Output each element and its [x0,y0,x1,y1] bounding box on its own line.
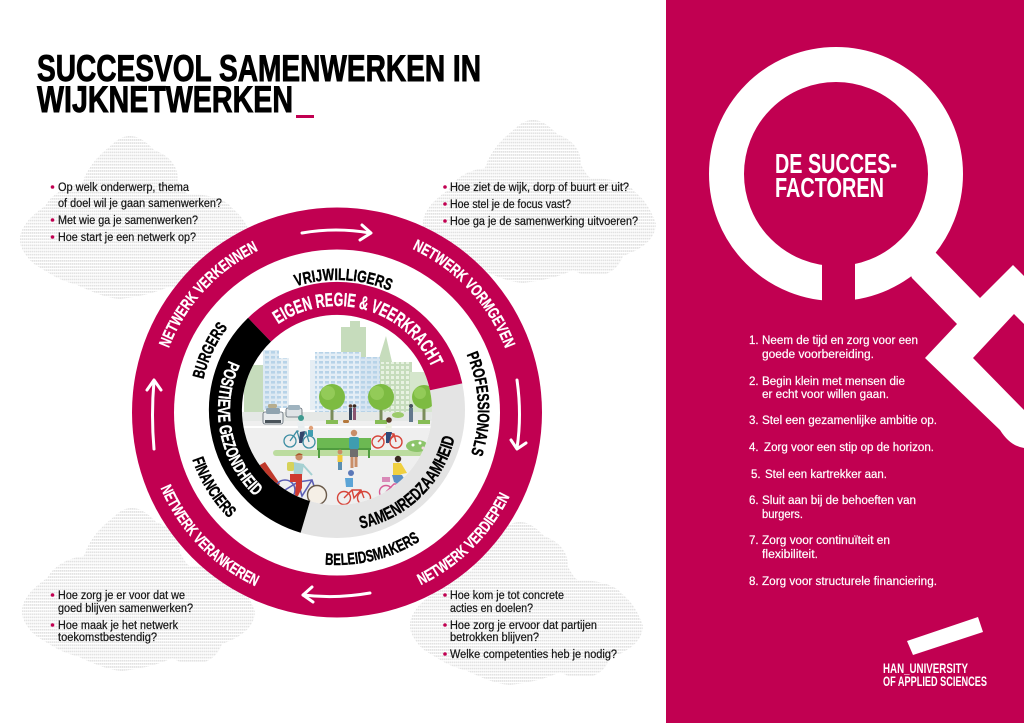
text block: network shaping questions: Hoe stel je de focus vast? [450,199,571,211]
list: success factors: Neem de tijd en zorg voor een [762,335,918,347]
inner band labels: SAMENREDZAAMHEID [359,436,454,528]
text block: network anchoring questions: Hoe zorg je er voor dat we [58,590,185,602]
centre buildings [310,352,380,412]
text block: network anchoring questions: Hoe maak je het netwerk [58,620,178,632]
cloud: bottom left [22,508,255,671]
flower bush [406,440,428,452]
text block: network exploring questions: Met wie ga je samenwerken? [58,215,198,227]
inner band labels: EIGEN REGIE & VEERKRACHT [272,292,444,366]
child cyclist [338,470,370,504]
outer ring labels: NETWERK VERANKEREN [160,484,260,586]
list: success factors: flexibiliteit. [762,549,818,561]
blue towers [263,350,289,410]
inner band labels: POSITIEVE GEZONDHEID [218,360,262,494]
stakeholder labels: FINANCIERS [192,456,236,517]
text block: network deepening questions: betrokken blijven? [450,632,539,644]
stakeholder labels: PROFESSIONALS [466,350,490,456]
title: WIJKNETWERKEN [37,79,293,120]
list: success factors: er echt voor willen gaan. [762,389,889,401]
trees [319,384,436,424]
list: success factors: 4. [749,442,759,454]
text block: network anchoring questions: goed blijven samenwerken? [58,603,193,615]
title: SUCCESVOL SAMENWERKEN IN [37,48,481,89]
text block: network exploring questions [51,182,222,244]
list: success factors [749,335,937,588]
text block: network shaping questions: Hoe ziet de wijk, dorp of buurt er uit? [450,182,629,194]
list: success factors: 6. [749,495,759,507]
panel: success factors [666,0,1024,723]
text block: network deepening questions [443,590,617,661]
list: success factors: Zorg voor een stip op de horizon. [764,442,934,454]
cloud: top left [20,136,253,299]
text block: network anchoring questions [51,590,193,644]
cloud: bottom right [410,522,643,685]
left green building [244,365,264,415]
arrow: right [511,380,526,449]
text block: network deepening questions: Hoe zorg je ervoor dat partijen [450,620,597,632]
text block: network exploring questions: Op welk onderwerp, thema [58,182,190,194]
cloud: top right [423,120,656,283]
list: success factors: Zorg voor structurele financiering. [762,576,937,588]
list: success factors: Stel een kartrekker aan. [765,469,887,481]
title [37,48,481,120]
text block: network exploring questions: Hoe start je een netwerk op? [58,232,196,244]
gray segment backing disc [209,282,465,538]
list: success factors: 5. [751,469,761,481]
outer ring labels: NETWERK VORMGEVEN [412,239,516,348]
text block: network exploring questions: of doel wil je gaan samenwerken? [58,198,222,210]
inner band: positieve gezondheid [225,330,305,517]
list: success factors: Begin klein met mensen die [762,376,905,388]
stakeholder labels: VRIJWILLIGERS [292,268,393,290]
right green towers [341,321,432,412]
list: success factors: burgers. [762,509,803,521]
circular diagram [132,208,542,618]
text block: network deepening questions: Hoe kom je tot concrete [450,590,564,602]
heading: de succesfactoren: FACTOREN [775,172,884,203]
icon: magnifier [726,64,1024,448]
text block: network anchoring questions: toekomstbestendig? [58,632,157,644]
text block: network shaping questions [443,182,638,228]
logo: HAN University of Applied Sciences [883,617,987,689]
text block: network shaping questions: Hoe ga je de samenwerking uitvoeren? [450,216,638,228]
list: success factors: 8. [749,576,759,588]
list: success factors: goede voorbereiding. [762,349,874,361]
logo: HAN University of Applied Sciences: HAN_UNIVERSITY [883,660,968,676]
girl on pink bike [380,456,407,498]
inner band: eigen regie and veerkracht [260,298,446,387]
cyclist red bike [372,417,402,448]
cars [263,404,302,424]
list: success factors: Sluit aan bij de behoeften van [762,495,916,507]
stakeholder labels: BURGERS [192,322,227,379]
list: success factors: 1. [749,335,759,347]
adult walking with child [338,430,359,470]
cyclist with child seat [284,415,315,448]
inner band labels [218,292,454,528]
list: success factors: 3. [749,415,759,427]
arrow: bottom [303,587,370,602]
list: success factors: Zorg voor continuïteit en [762,535,890,547]
outer ring labels: NETWERK VERKENNEN [158,240,258,348]
list: success factors: 7. [749,535,759,547]
text block: network deepening questions: acties en doelen? [450,603,533,615]
arrow: top [302,225,371,240]
stakeholder labels [192,268,490,566]
heading: de succesfactoren: DE SUCCES- [775,148,897,179]
green strip and bench [273,438,423,458]
text block: network deepening questions: Welke competenties heb je nodig? [450,649,617,661]
outer ring labels: NETWERK VERDIEPEN [416,492,510,586]
outer ring [132,208,542,618]
list: success factors: Stel een gezamenlijke ambitie op. [762,415,937,427]
illustration: neighbourhood scene [235,314,436,512]
arrow: left [147,380,161,449]
pedestrians and dog [343,404,413,423]
outer ring labels [158,239,516,586]
cyclist purple bike [260,453,328,504]
stakeholder labels: BELEIDSMAKERS [326,532,419,566]
heading: de succesfactoren [775,148,897,203]
list: success factors: 2. [749,376,759,388]
